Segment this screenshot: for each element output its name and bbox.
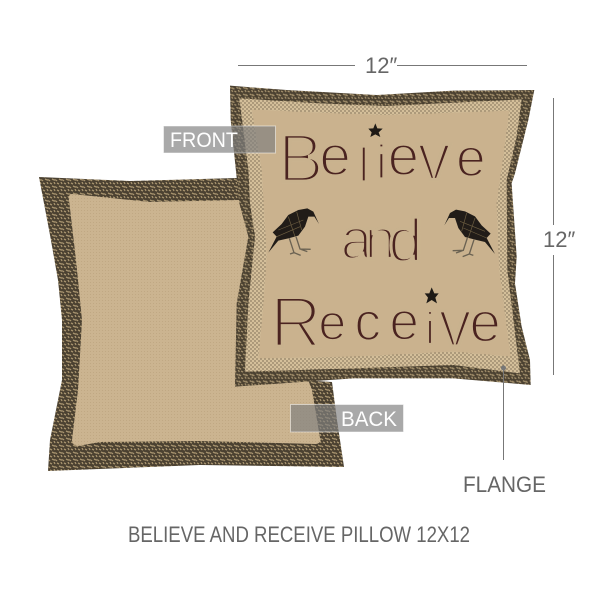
stitched word: and: n <box>364 208 396 271</box>
back pillow flange <box>39 177 344 471</box>
stitched word: Believe: v <box>417 120 451 194</box>
height dimension arrow: 12″ <box>543 227 575 252</box>
top star <box>368 123 383 137</box>
icon: left crow <box>268 208 319 255</box>
stitched word: Receive: c <box>354 293 381 352</box>
width dimension arrow: 12″ <box>365 53 397 78</box>
product title: BELIEVE AND RECEIVE PILLOW 12X12 <box>128 522 470 547</box>
stitched word: and: d <box>388 207 423 276</box>
stitched word: Receive: v <box>438 287 472 361</box>
back pillow burlap centre <box>69 194 320 446</box>
back label <box>290 404 404 432</box>
stitched word: Receive: e <box>318 294 346 350</box>
stitched word: Receive: e <box>389 292 419 351</box>
stitched word: Believe: e <box>319 125 351 188</box>
stitched word: Receive: i <box>425 303 435 354</box>
stitched word: Believe: e <box>456 129 486 188</box>
stitched word: and: a <box>341 208 373 271</box>
stitched word: Receive: e <box>469 292 501 355</box>
front pillow flange <box>230 86 534 387</box>
stitched word: Believe: i <box>376 135 387 189</box>
back pillow <box>39 177 344 471</box>
stitched word: Believe: l <box>358 139 369 193</box>
front burlap centre <box>252 109 511 358</box>
front pillow <box>230 86 534 387</box>
back label: BACK <box>341 408 397 431</box>
lower star <box>425 287 439 303</box>
stitched word: Receive: R <box>270 283 322 363</box>
flange callout <box>463 366 546 497</box>
flange callout: FLANGE <box>463 472 546 497</box>
icon: right crow <box>444 210 495 257</box>
dotted inner border <box>239 98 522 373</box>
front label <box>164 126 276 153</box>
stitched word: Believe: e <box>388 125 419 188</box>
front label: FRONT <box>170 129 238 152</box>
stitched word: Believe: B <box>278 121 324 197</box>
